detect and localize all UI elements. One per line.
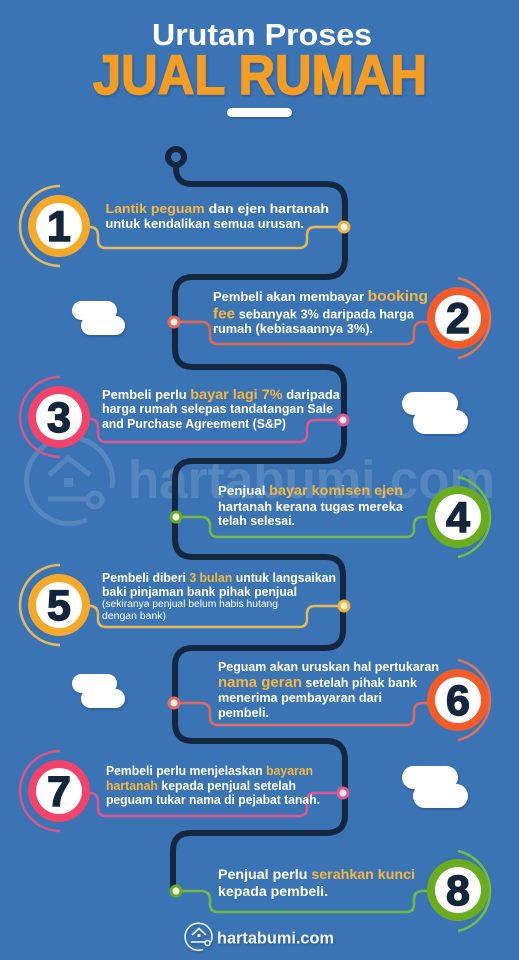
clouds [72,301,468,808]
cloud upper left [72,301,125,335]
text 5: dengan bank) [102,611,166,622]
connector 1 [90,222,349,248]
badge 6 [427,660,490,740]
text 8: kepada pembeli. [218,883,328,899]
text 3: harga rumah selepas tandatangan Sale [102,402,333,416]
logo icon [185,923,212,950]
text 8 [218,866,415,899]
badge 8: 8 [446,867,470,915]
step 8 [171,851,490,931]
text 3: and Purchase Agreement (S&P) [102,417,286,431]
text 5 [102,571,336,622]
title underline [227,108,292,117]
step 4 [171,477,490,557]
footer logo [185,923,334,950]
text 6 [218,660,439,720]
badge 3: 3 [47,394,71,442]
text 4 [218,483,404,528]
text 3: Pembeli perlu bayar lagi 7% daripada [102,386,341,402]
winding road path [168,149,345,891]
text 5: Pembeli diberi 3 bulan untuk langsaikan [102,571,336,585]
text 4: Penjual bayar komisen ejen [218,483,403,498]
badge 7 [20,751,90,831]
text 2: fee sebanyak 3% daripada harga [213,306,415,322]
badge 5: 5 [47,582,71,630]
watermark: hartabumi logo [27,438,495,524]
text 6: nama geran setelah pihak bank [218,674,417,691]
step 3 [20,377,348,457]
badge 2: 2 [446,295,470,343]
connector 8 [171,886,430,912]
cloud lower left [72,674,125,708]
step 2 [169,278,490,358]
text 7: hartanah kepada penjual setelah [106,779,296,793]
connector 6 [169,698,430,725]
text 1: Lantik peguam dan ejen hartanah [106,202,329,216]
text 5: (sekiranya penjual belum habis hutang [102,599,278,610]
title [93,17,427,117]
cloud upper right [402,392,468,434]
badge 5 [20,565,90,645]
cloud lower right [402,766,468,808]
text 7: Pembeli perlu menjelaskan bayaran [106,764,313,778]
logo wordmark: hartabumi.com [217,928,334,948]
badge 4 [427,477,490,557]
watermark: hartabumi logo: hartabumi.com [128,450,495,510]
text 2: rumah (kebiasaannya 3%). [213,322,373,336]
text 6: pembeli. [218,706,269,720]
text 7: peguam tukar nama di pejabat tanah. [106,793,320,807]
text 1 [106,202,329,231]
text 6: menerima pembayaran dari [218,691,382,705]
title line 1: Urutan Proses [152,17,372,52]
badge 1 [20,186,90,266]
badge 7: 7 [47,768,71,816]
text 1: untuk kendalikan semua urusan. [106,217,304,231]
connector 7 [90,788,348,816]
text 8: Penjual perlu serahkan kunci [218,866,415,882]
step 5 [20,565,349,645]
text 6: Peguam akan uruskan hal pertukaran [218,660,439,674]
connector 2 [169,317,430,344]
step 6 [169,660,490,740]
badge 2 [427,278,490,358]
badge 6: 6 [446,677,470,725]
badge 8 [427,851,490,931]
connector 5 [90,601,349,627]
text 3 [102,386,341,431]
step 1 [20,186,349,266]
connector 4 [171,512,430,537]
text 4: hartanah kerana tugas mereka [218,500,404,514]
badge 1: 1 [47,203,71,251]
badge 3 [20,377,90,457]
text 2 [213,288,428,336]
connector 3 [90,415,348,442]
text 5: baki pinjaman bank pihak penjual [102,585,297,599]
text 7 [106,764,320,807]
title line 2: JUAL RUMAH [93,43,427,106]
text 4: telah selesai. [218,514,295,528]
text 2: Pembeli akan membayar booking [213,288,428,305]
step 7 [20,751,348,831]
badge 4: 4 [446,494,470,542]
